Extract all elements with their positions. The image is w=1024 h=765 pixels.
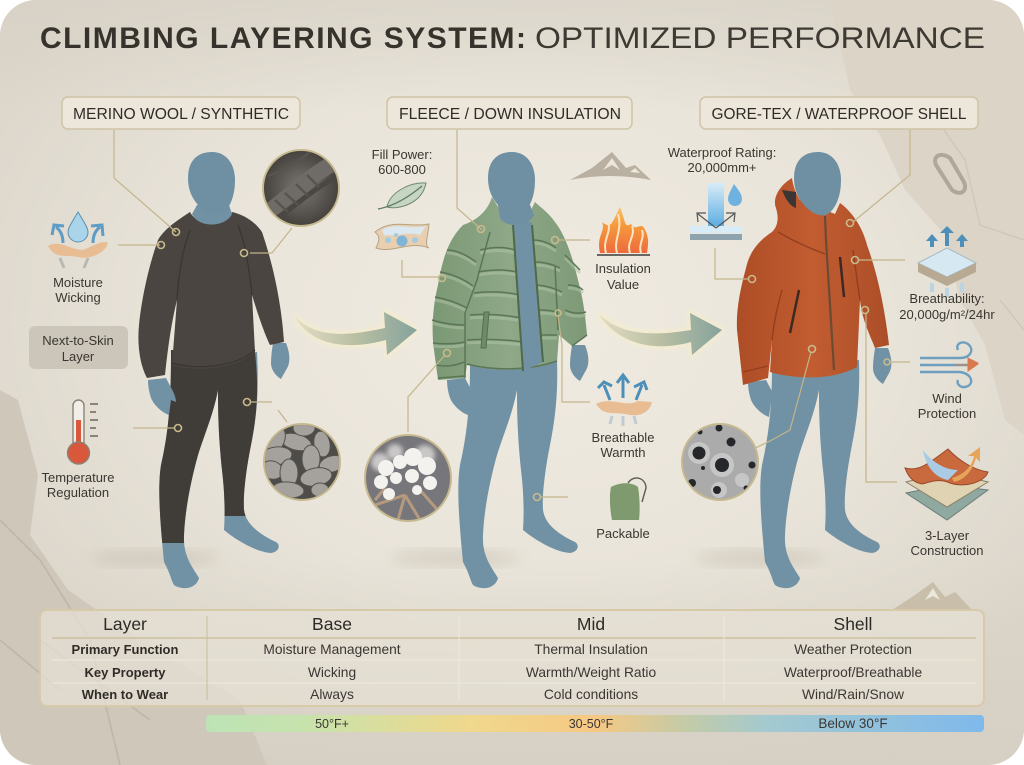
heading box: mid layer [387,97,632,129]
callout: next-to-skin layer: Layer [62,349,95,364]
text: moisture wicking: Wicking [55,290,101,305]
icon: stuff sack [610,478,646,520]
rock: bottom left [0,390,267,765]
text: 3-layer construction: Construction [911,543,983,558]
text: breathable warmth: Warmth [600,445,646,460]
arrow: mid to shell [598,313,722,355]
arrow: base to mid [295,312,417,355]
detail circle: membrane pores [682,424,758,500]
table header row: Mid [577,614,605,634]
text: moisture wicking: Moisture [53,275,103,290]
comparison table [40,610,984,706]
text: waterproof rating: 20,000mm+ [687,160,757,175]
detail circle: down cluster [365,435,451,521]
figure: base layer mannequin [138,152,289,588]
table header row [103,614,872,634]
table row: primary function: Moisture Management [263,642,401,657]
rock: top right [830,0,1024,435]
table row: primary function [72,642,912,657]
text: waterproof rating: Waterproof Rating: [668,145,776,160]
text: breathability: 20,000g/m²/24hr [899,307,995,322]
icon: small mountain [892,582,972,610]
text: insulation value: Value [607,277,639,292]
temperature gradient bar: Below 30°F [818,716,888,731]
table row: when to wear: Always [310,687,354,702]
text: packable: Packable [596,526,650,541]
text: 3-layer construction: 3-Layer [925,528,970,543]
table row: key property: Waterproof/Breathable [784,665,922,680]
temperature gradient bar: 30-50°F [569,717,614,731]
icon: feather [378,183,426,209]
icon: thermometer [68,400,98,464]
heading box: shell layer [700,97,978,129]
icon: breathable warmth [596,375,652,426]
icon: flames [597,207,650,255]
figure: mid layer mannequin [432,152,588,588]
text: insulation value: Insulation [595,261,651,276]
text: temperature regulation: Temperature [42,470,114,485]
icon: breathability [918,226,976,297]
callout: next-to-skin layer [29,326,128,369]
title: CLIMBING LAYERING SYSTEM: [40,22,526,55]
table header row: Layer [103,614,147,634]
icon: wind [920,342,978,387]
icon: moisture wicking [48,212,108,268]
table row: key property [85,665,922,680]
text: breathability: Breathability: [909,291,985,306]
text: breathable warmth: Breathable [592,430,654,445]
detail circle: knit weave [263,423,341,501]
table row: key property: Key Property [85,665,166,680]
table row: key property: Wicking [308,665,356,680]
icon: down structure [375,224,429,250]
leader lines and markers [114,130,910,500]
heading box: mid layer: FLEECE / DOWN INSULATION [399,106,621,123]
table row: primary function: Weather Protection [794,642,912,657]
table row: when to wear: Cold conditions [544,687,638,702]
text: wind protection: Wind [932,391,962,406]
table row: when to wear: Wind/Rain/Snow [802,687,904,702]
table header row: Base [312,614,352,634]
heading box: base layer [62,97,300,129]
detail circle: wool fabric [263,150,339,226]
heading box: base layer: MERINO WOOL / SYNTHETIC [73,106,289,123]
table row: key property: Warmth/Weight Ratio [526,665,656,680]
text: temperature regulation: Regulation [47,485,109,500]
callout: next-to-skin layer: Next-to-Skin [42,333,114,348]
table row: primary function: Thermal Insulation [534,642,648,657]
figure: shell layer mannequin [737,152,891,588]
table row: when to wear [82,687,904,702]
icon: waterproof membrane [690,183,742,240]
table row: when to wear: When to Wear [82,687,168,702]
table header row: Shell [834,614,872,634]
temperature gradient bar [206,715,984,732]
icon: carabiner [935,155,965,193]
icon: 3-layer construction [905,447,988,520]
icon: mountain [570,152,651,180]
text: wind protection: Protection [918,406,976,421]
title [40,22,985,55]
title: OPTIMIZED PERFORMANCE [535,22,985,55]
text: fill power: Fill Power: [372,147,432,162]
floor shadows [90,549,825,567]
heading box: shell layer: GORE-TEX / WATERPROOF SHELL [712,106,967,123]
temperature gradient bar: 50°F+ [315,717,349,731]
table row: primary function: Primary Function [72,642,179,657]
text: fill power: 600-800 [378,162,426,177]
